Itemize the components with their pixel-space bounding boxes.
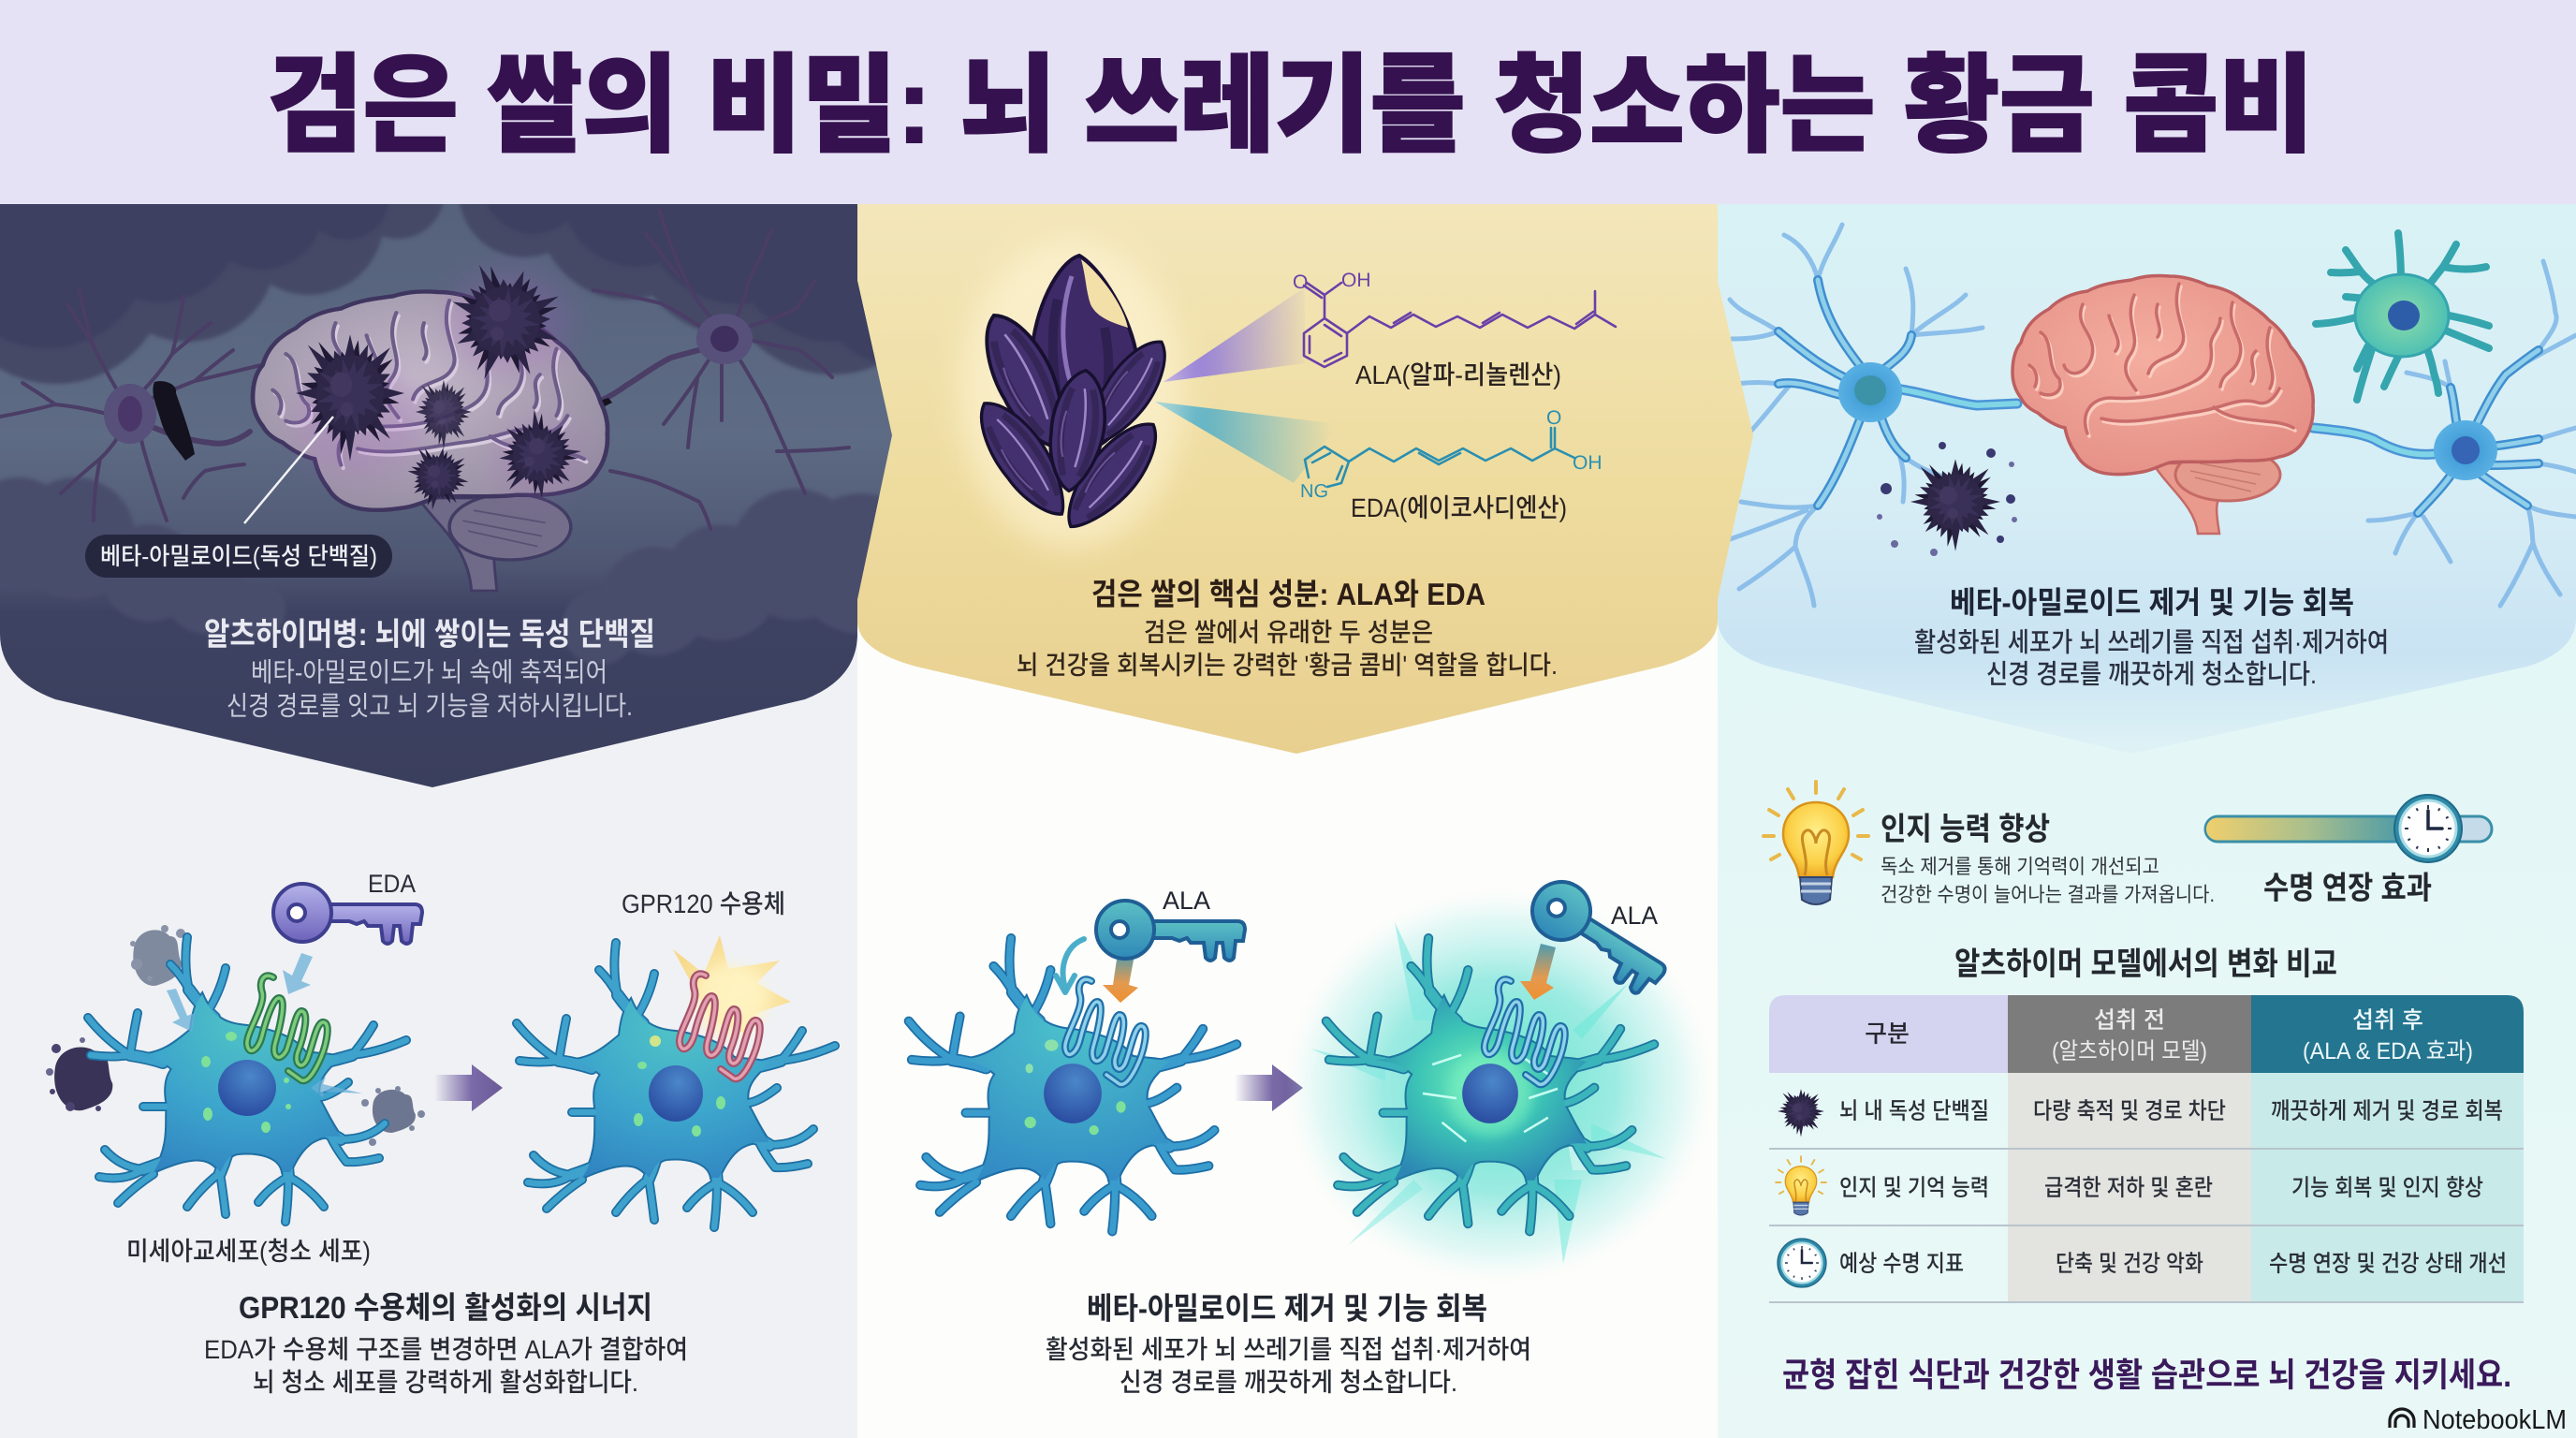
glow: activated cell <box>1286 889 1713 1283</box>
icon: microglia resting <box>88 937 406 1222</box>
title: 검은 쌀의 비밀: 뇌 쓰레기를 청소하는 황금 콤비 <box>268 47 2314 166</box>
debris: amyloid fragments <box>46 925 425 1146</box>
arrow: activation step <box>434 1064 503 1111</box>
callout: beta-amyloid label: 베타-아밀로이드(독성 단백질) <box>100 542 377 570</box>
icon: healthy pink brain <box>2012 275 2313 534</box>
chart: EDA molecule: O <box>1546 407 1561 429</box>
table: comparison <box>1769 995 2524 1302</box>
table row: lifespan: 단축 및 건강 악화 <box>2056 1251 2203 1277</box>
arrow: ALA docking orange <box>1103 953 1138 1003</box>
icon: EDA key <box>273 884 422 944</box>
table row: cognition: 인지 및 기억 능력 <box>1839 1175 1989 1201</box>
icon: GPR120 receptor green <box>247 976 328 1080</box>
arrow: curved docking <box>1056 939 1084 992</box>
table header: 구분 <box>1865 1020 1910 1048</box>
table row: toxic protein: 다량 축적 및 경로 차단 <box>2033 1098 2226 1124</box>
chart: lifespan bar <box>2205 795 2492 862</box>
text: synergy description line 1: EDA가 수용체 구조를 변경하면 ALA가 결합하여 <box>204 1335 688 1364</box>
icon: shrinking amyloid plaque <box>1877 442 2017 556</box>
arrows: uptake flow <box>167 953 362 1097</box>
logo: NotebookLM: NotebookLM <box>2422 1405 2567 1435</box>
chart: EDA molecule: OH <box>1573 452 1603 474</box>
label: ALA: ALA(알파-리놀렌산) <box>1355 360 1561 389</box>
text: removal line 2: 신경 경로를 깨끗하게 청소합니다. <box>1120 1368 1457 1397</box>
chart: ALA molecule: OH <box>1341 270 1370 291</box>
neuron: right dark <box>571 211 849 529</box>
table header: (ALA & EDA 효과) <box>2303 1038 2473 1064</box>
icon: ALA key docked <box>1520 871 1678 1001</box>
icon: GPR120 receptor pink <box>680 974 760 1078</box>
label: microglia: 미세아교세포(청소 세포) <box>126 1237 371 1266</box>
heading: removal and recovery: 베타-아밀로이드 제거 및 기능 회복 <box>1950 585 2354 620</box>
icon: receptor blue activated <box>1485 979 1565 1084</box>
text: removal description line 1: 활성화된 세포가 뇌 쓰레기를 직접 섭취·제거하여 <box>1914 628 2389 658</box>
chart: ALA molecule: O <box>1293 271 1308 293</box>
chart: EDA molecule: NG <box>1300 481 1328 502</box>
heading: core components: 검은 쌀의 핵심 성분: ALA와 EDA <box>1091 577 1486 611</box>
table row: cognition: 기능 회복 및 인지 향상 <box>2291 1175 2483 1201</box>
text: cognitive line 1: 독소 제거를 통해 기억력이 개선되고 <box>1881 855 2159 878</box>
icon: diseased brain <box>253 246 607 591</box>
callout pointer line <box>244 417 333 523</box>
storm clouds <box>0 204 880 664</box>
header band with title <box>0 0 2576 204</box>
chart: EDA molecule <box>1300 407 1603 502</box>
light ray: ALA <box>1164 287 1305 382</box>
text: removal description line 2: 신경 경로를 깨끗하게 청소합니다. <box>1986 660 2317 690</box>
table row: cognition <box>1776 1156 2483 1215</box>
table header: 섭취 전 <box>2094 1007 2165 1034</box>
panel: alzheimer's disease (dark) <box>0 204 892 787</box>
neuron: teal upper right <box>2316 233 2489 400</box>
icon: receptor blue <box>1065 979 1146 1084</box>
callout: beta-amyloid label <box>85 535 392 578</box>
chart: ALA molecule <box>1293 270 1616 367</box>
table header: (알츠하이머 모델) <box>2052 1038 2207 1064</box>
text: synergy description line 2: 뇌 청소 세포를 강력하게 활성화합니다. <box>253 1368 638 1397</box>
heading: alzheimer's: 알츠하이머병: 뇌에 쌓이는 독성 단백질 <box>204 617 655 653</box>
icon: microglia before ALA <box>909 938 1237 1231</box>
column background: right <box>1718 204 2576 1438</box>
icon: ALA key <box>1096 901 1245 961</box>
label: GPR120 receptor: GPR120 수용체 <box>622 889 785 918</box>
table row: lifespan: 수명 연장 및 건강 상태 개선 <box>2269 1251 2507 1277</box>
heading: GPR120 synergy: GPR120 수용체의 활성화의 시너지 <box>239 1290 652 1325</box>
text: disease description line 1: 베타-아밀로이드가 뇌 속에 축적되어 <box>251 658 607 688</box>
neuron: right blue <box>2313 261 2576 606</box>
table row: toxic protein: 뇌 내 독성 단백질 <box>1839 1098 1989 1124</box>
label: EDA: EDA(에이코사디엔산) <box>1351 493 1567 522</box>
icon: starburst <box>673 935 791 1037</box>
neuron: left blue <box>1730 225 2017 606</box>
heading: removal and recovery: 베타-아밀로이드 제거 및 기능 회복 <box>1087 1291 1487 1326</box>
table header <box>1769 995 2524 1073</box>
label: ALA docked: ALA <box>1611 902 1658 930</box>
table header: 섭취 후 <box>2352 1007 2423 1034</box>
text: removal line 1: 활성화된 세포가 뇌 쓰레기를 직접 섭취·제거하여 <box>1046 1335 1531 1364</box>
heading: comparison: 알츠하이머 모델에서의 변화 비교 <box>1954 946 2337 982</box>
light ray: EDA <box>1155 402 1339 483</box>
panel: black rice components (gold) <box>857 204 1753 754</box>
arrow: activation step <box>1235 1064 1303 1111</box>
icon: clock <box>2394 795 2462 862</box>
panel: benefits and comparison <box>1764 782 2567 1435</box>
icon: microglia activated by ALA <box>1326 938 1654 1231</box>
table row: lifespan <box>1778 1239 2507 1287</box>
text: disease description line 2: 신경 경로를 잇고 뇌 기능을 저하시킵니다. <box>227 692 633 722</box>
neuron: left dark <box>0 290 261 521</box>
text: cognitive line 2: 건강한 수명이 늘어나는 결과를 가져옵니다. <box>1881 883 2215 906</box>
panel: ALA activation <box>909 871 1713 1397</box>
table row: lifespan: 예상 수명 지표 <box>1839 1251 1964 1277</box>
text: components description line 2: 뇌 건강을 회복시키는 강력한 '황금 콤비' 역할을 합니다. <box>1017 651 1558 680</box>
table row: cognition: 급격한 저하 및 혼란 <box>2044 1175 2213 1201</box>
icon: light bulb <box>1764 782 1868 904</box>
icon: amyloid plaques <box>291 246 599 520</box>
arrow: ALA docked orange <box>1520 944 1556 1000</box>
text: components description line 1: 검은 쌀에서 유래한 두 성분은 <box>1144 618 1433 647</box>
table row: toxic protein: 깨끗하게 제거 및 경로 회복 <box>2271 1098 2503 1124</box>
icon: black rice grains <box>959 239 1184 548</box>
panel: GPR120 synergy <box>46 870 835 1397</box>
panel: recovered brain (blue) <box>1718 204 2576 754</box>
column background: left <box>0 204 857 1438</box>
heading: cognitive improvement: 인지 능력 향상 <box>1881 812 2050 847</box>
table row: toxic protein <box>1776 1087 2503 1138</box>
label: ALA: ALA <box>1163 887 1210 915</box>
icon: microglia activated by EDA <box>517 943 835 1227</box>
label: EDA: EDA <box>368 870 416 898</box>
heading: lifespan: 수명 연장 효과 <box>2263 871 2432 906</box>
